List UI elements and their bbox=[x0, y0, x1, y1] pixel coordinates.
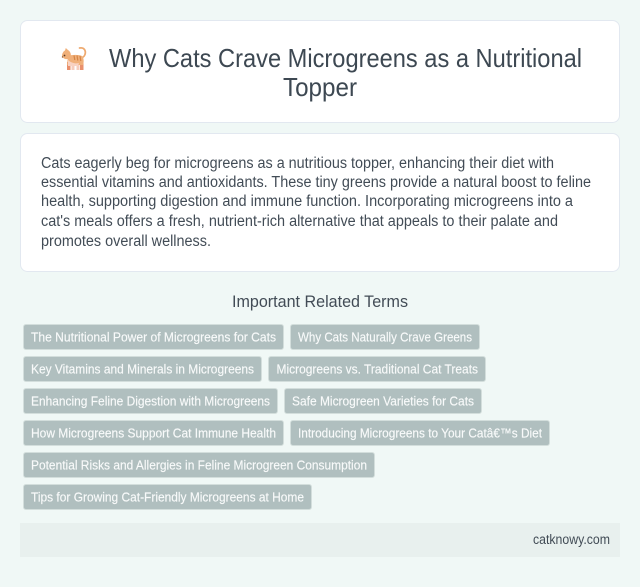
tag: Why Cats Naturally Crave Greens bbox=[298, 330, 472, 344]
text block: intro paragraph bbox=[41, 155, 591, 250]
footer source text: catknowy.com bbox=[533, 532, 610, 547]
text block: intro paragraph: health, supporting digestion and immune function. Incorporating microgreens into a bbox=[41, 193, 573, 210]
tag bbox=[284, 388, 482, 414]
text block: intro paragraph: cat's meals offers a fresh, nutrient-rich alternative that appeals to their palate and bbox=[41, 213, 558, 230]
icon: orange cat bbox=[62, 48, 85, 70]
footer bbox=[20, 523, 620, 557]
tag bbox=[24, 324, 284, 350]
tag: How Microgreens Support Cat Immune Health bbox=[31, 426, 276, 440]
tag: Tips for Growing Cat-Friendly Microgreens at Home bbox=[31, 490, 304, 504]
tag: Introducing Microgreens to Your Catâ€™s Diet bbox=[298, 426, 542, 440]
tag bbox=[290, 420, 550, 446]
title: Topper bbox=[283, 72, 357, 102]
tag bbox=[24, 484, 312, 510]
tag: The Nutritional Power of Microgreens for Cats bbox=[31, 330, 276, 344]
panel: intro text card bbox=[20, 134, 620, 272]
panel: related term tags bbox=[24, 324, 550, 510]
tag bbox=[268, 356, 486, 382]
tag bbox=[24, 388, 278, 414]
tag bbox=[24, 356, 262, 382]
tag: Key Vitamins and Minerals in Microgreens bbox=[31, 362, 254, 376]
tag: Enhancing Feline Digestion with Microgreens bbox=[31, 394, 270, 408]
tag bbox=[290, 324, 480, 350]
text block: intro paragraph: promotes overall wellness. bbox=[41, 233, 211, 250]
heading: related terms: Important Related Terms bbox=[232, 293, 408, 311]
tag: Safe Microgreen Varieties for Cats bbox=[292, 394, 474, 408]
tag: Potential Risks and Allergies in Feline Microgreen Consumption bbox=[31, 458, 367, 472]
tag: Microgreens vs. Traditional Cat Treats bbox=[276, 362, 478, 376]
title: Why Cats Crave Microgreens as a Nutritional bbox=[109, 43, 582, 73]
title bbox=[109, 43, 582, 102]
panel: header card bbox=[20, 20, 620, 122]
tag bbox=[24, 420, 284, 446]
tag bbox=[24, 452, 374, 478]
text block: intro paragraph: essential vitamins and antioxidants. These tiny greens provide a natural boost to feline bbox=[41, 174, 591, 191]
text block: intro paragraph: Cats eagerly beg for microgreens as a nutritious topper, enhancing their diet with bbox=[41, 155, 554, 172]
